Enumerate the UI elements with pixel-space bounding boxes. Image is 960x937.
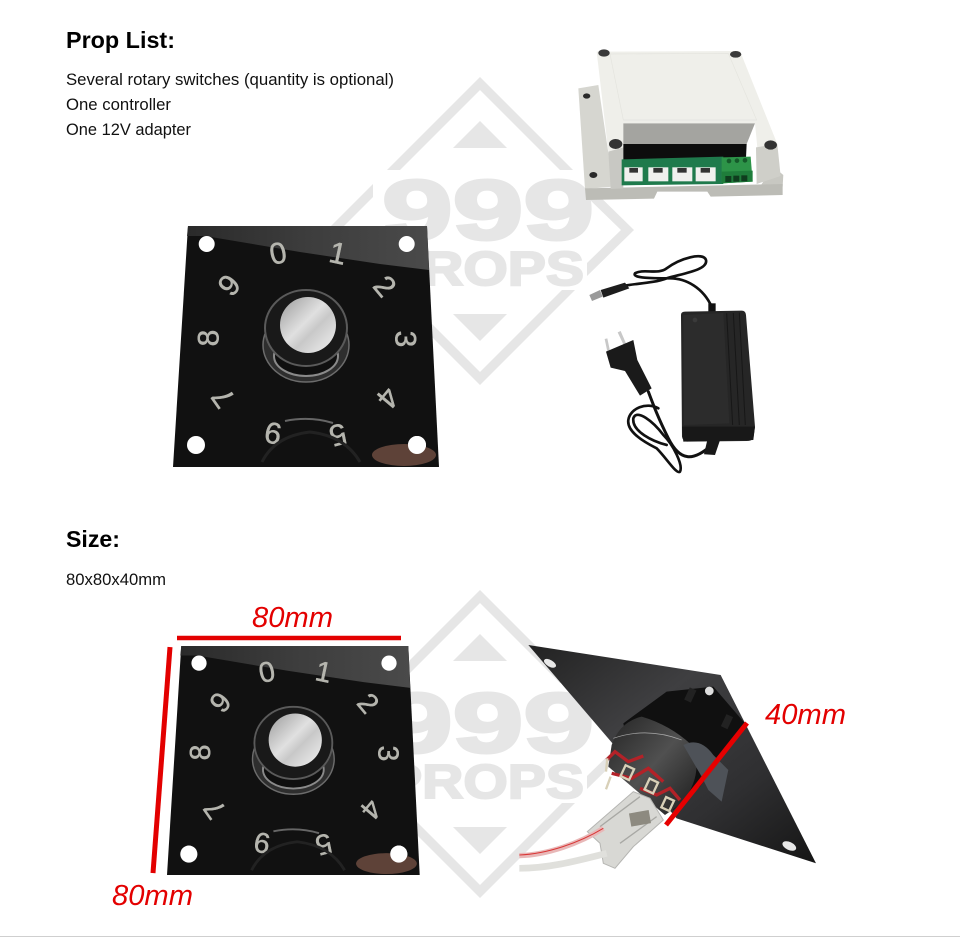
corner holes (180, 656, 407, 863)
dial numbers: 6 (262, 416, 284, 452)
text block: prop list items: Several rotary switches (quantity is optional) (66, 71, 394, 89)
red label: top 80mm: 80mm (252, 602, 333, 634)
knob (253, 707, 334, 794)
dial numbers: 6 (251, 827, 272, 861)
red dimension line: left height (153, 647, 170, 873)
photo: controller box (578, 49, 783, 200)
watermark: lower 999 props logo (327, 590, 634, 898)
dial numbers: 0 (256, 655, 278, 690)
corner holes (187, 236, 426, 454)
photo: rotary switch rear view with wiring (519, 645, 816, 868)
dial numbers: 2 (366, 270, 402, 304)
knob (263, 290, 349, 382)
heading: prop list: Prop List: (66, 27, 175, 53)
dial numbers: 1 (312, 655, 335, 690)
red dimension line: depth (666, 723, 747, 825)
photo: rotary switch panel with dial (173, 226, 439, 467)
red dimension line: top width (177, 636, 401, 640)
heading: size: Size: (66, 526, 120, 552)
text block: prop list items: One 12V adapter (66, 121, 191, 139)
dial numbers: 5 (325, 416, 350, 452)
dial numbers: 4 (353, 792, 388, 825)
watermark: upper 999 props logo (327, 77, 634, 385)
dial numbers: 3 (388, 331, 422, 347)
photo: power adapter with cords (589, 256, 755, 472)
dial numbers: 5 (312, 826, 335, 861)
dial numbers: 2 (350, 687, 385, 720)
dial numbers (192, 236, 422, 452)
dial numbers: 1 (326, 236, 349, 272)
watermark: lower 999 props logo: 999 (382, 676, 594, 770)
dial numbers: 4 (369, 380, 405, 414)
dial numbers: 9 (212, 269, 248, 303)
text block: prop list items: One controller (66, 96, 172, 114)
red label: left 80mm: 80mm (112, 880, 193, 912)
dial numbers: 9 (204, 686, 238, 719)
dial numbers: 7 (206, 381, 242, 414)
photo: rotary switch panel front view (167, 646, 420, 875)
dial numbers: 3 (371, 745, 403, 761)
watermark: lower 999 props logo: PROPS (384, 756, 584, 809)
text block: prop list items (66, 71, 394, 139)
text block: dimensions: 80x80x40mm (66, 571, 166, 589)
watermark: upper 999 props logo: 999 (382, 163, 594, 257)
dial numbers: 8 (185, 745, 217, 760)
dial numbers: 0 (267, 236, 290, 272)
watermark: upper 999 props logo: PROPS (384, 243, 584, 296)
dial numbers (185, 655, 403, 861)
dial numbers: 8 (192, 330, 226, 346)
red label: 40mm: 40mm (765, 699, 846, 731)
dial numbers: 7 (198, 793, 233, 825)
